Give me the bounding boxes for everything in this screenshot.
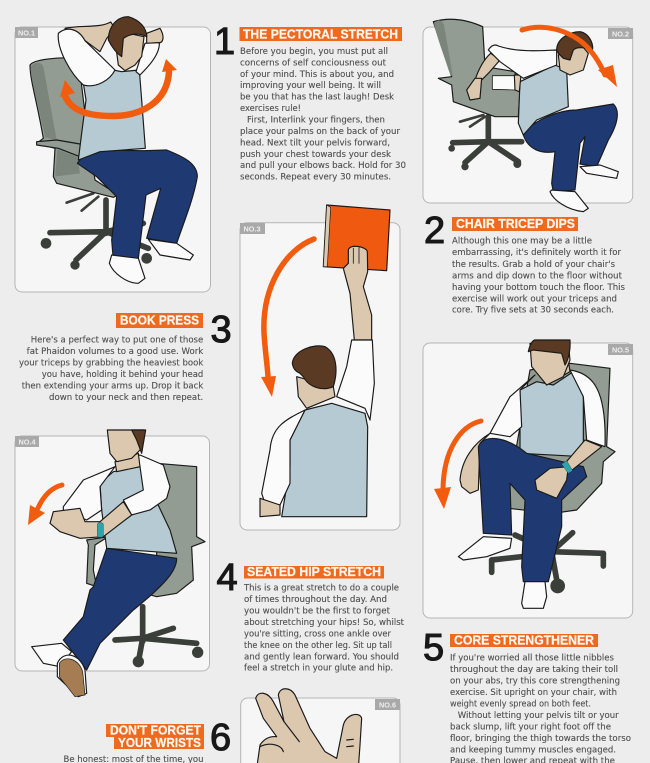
arrow: chest rotation [60, 59, 177, 116]
number 1: 1 [214, 21, 235, 63]
body text: This is a great stretch to do a couple [243, 584, 399, 594]
number 5: 5 [423, 627, 444, 669]
section 4 text [216, 557, 405, 674]
body text [450, 654, 631, 763]
panel: chair tricep dips illustration [423, 19, 633, 212]
panel: wrist stretch illustration [241, 689, 400, 763]
panel: pectoral stretch illustration: NO.1 [18, 30, 35, 38]
body text: Although this one may be a little [452, 237, 592, 247]
arrow: pull wrist [28, 485, 62, 525]
arrow: lower book [261, 239, 314, 397]
body text: fat Phaidon volumes to a good use. Work [27, 347, 203, 357]
heading: seated hip stretch: SEATED HIP STRETCH [247, 565, 381, 579]
body text: place your palms on the back of your [240, 127, 400, 137]
figure: man pressing book overhead [260, 205, 390, 517]
body text: then extending your arms up. Drop it back [22, 381, 203, 391]
figure: man dipping off chair [433, 19, 618, 212]
arrow: dip down [522, 27, 617, 87]
body text: on your abs, try this core strengthening [450, 676, 620, 686]
body text: and gently lean forward. You should [244, 652, 399, 662]
body text: core. Try five sets at 30 seconds each. [452, 306, 614, 316]
body text [240, 47, 406, 182]
heading: don't forget your wrists: YOUR WRISTS [118, 736, 201, 750]
body text: you have, holding it behind your head [42, 370, 203, 380]
body text: throughout the day are taking their toll [450, 665, 618, 675]
panel: seated hip stretch illustration [15, 430, 210, 697]
body text: the results. Grab a hold of your chair's [452, 260, 616, 270]
body text: you wouldn't be the first to forget [244, 606, 391, 616]
section 1 text [214, 21, 406, 182]
body text: of your mind. This is about you, and [240, 70, 394, 80]
body text: Here's a perfect way to put one of those [31, 336, 203, 346]
body text: First, Interlink your fingers, then [247, 116, 385, 126]
panel: core strengthener illustration: NO.5 [612, 348, 629, 354]
panel: core strengthener illustration [423, 340, 633, 618]
body text: down to your neck and then repeat. [49, 393, 203, 403]
body text [452, 237, 626, 316]
body text: If you're worried all those little nibbles [450, 654, 615, 664]
body text: of times throughout the day. And [244, 595, 387, 605]
body text: exercise. Sit upright on your chair, with [450, 688, 617, 698]
body text: floor, bringing the thigh towards the torso [450, 734, 631, 744]
body text: exercise will work out your triceps and [452, 294, 617, 304]
section 5 text [423, 627, 631, 763]
panel: pectoral stretch illustration [15, 17, 210, 292]
section 3 text [19, 309, 232, 403]
body text: your triceps by grabbing the heaviest book [19, 358, 203, 368]
panel: book press illustration: NO.3 [244, 226, 261, 234]
figure: man crossing ankle over knee [32, 430, 205, 697]
panel: wrist stretch illustration: NO.6 [379, 702, 396, 710]
body text: and pull your elbows back. Hold for 30 [240, 161, 406, 171]
body text: the knee on the other leg. Sit up tall [244, 641, 392, 651]
body text: improving your well being. It will [240, 81, 381, 91]
body text: having your bottom touch the floor. This [452, 283, 626, 293]
panel: seated hip stretch illustration: NO.4 [18, 440, 36, 446]
heading: don't forget your wrists: DON'T FORGET [110, 724, 201, 738]
body text: weight evenly spread on both feet. [450, 700, 591, 710]
body text: be you that has the last laugh! Desk [240, 93, 394, 103]
body text: about stretching your hips! So, whilst [244, 618, 405, 628]
section 2 text [424, 210, 626, 316]
body text: push your chest towards your desk [240, 150, 391, 160]
heading: book press: BOOK PRESS [120, 314, 199, 328]
body text: feel a stretch in your glute and hip. [244, 664, 393, 674]
body text [243, 584, 405, 674]
number 4: 4 [216, 557, 238, 599]
number 2: 2 [424, 210, 445, 252]
heading: chair tricep dips: CHAIR TRICEP DIPS [456, 217, 575, 231]
body text: and keeping tummy muscles engaged. [450, 745, 616, 755]
body text: seconds. Repeat every 30 minutes. [240, 172, 391, 182]
body text: embarrassing, it's definitely worth it for [452, 248, 621, 258]
figure: hand with fingers bent back [256, 689, 362, 763]
body text [19, 336, 203, 403]
heading: core strengthener: CORE STRENGTHENER [454, 634, 594, 648]
body text: concerns of self conciousness out [240, 58, 387, 68]
body text: exercises rule! [240, 104, 301, 114]
body text: back slump, lift your right foot off the [450, 722, 611, 732]
heading: don't forget your wrists [106, 724, 204, 750]
figure: man stretching in office chair [30, 17, 197, 283]
body text: you're sitting, cross one ankle over [244, 629, 391, 639]
body text: Before you begin, you must put all [240, 47, 388, 57]
section 6 text [64, 717, 231, 763]
number 6: 6 [210, 717, 231, 759]
panel: chair tricep dips illustration: NO.2 [612, 32, 629, 38]
body text: arms and dip down to the floor without [452, 272, 623, 282]
figure: man lifting knee in chair [458, 340, 615, 608]
number 3: 3 [210, 309, 232, 351]
arrow: lower leg [434, 421, 481, 509]
heading: the pectoral stretch: THE PECTORAL STRETCH [243, 27, 398, 41]
panel: book press illustration [240, 205, 400, 530]
body text: head. Next tilt your pelvis forward, [240, 138, 390, 148]
body text: Without letting your pelvis tilt or your [458, 711, 619, 721]
